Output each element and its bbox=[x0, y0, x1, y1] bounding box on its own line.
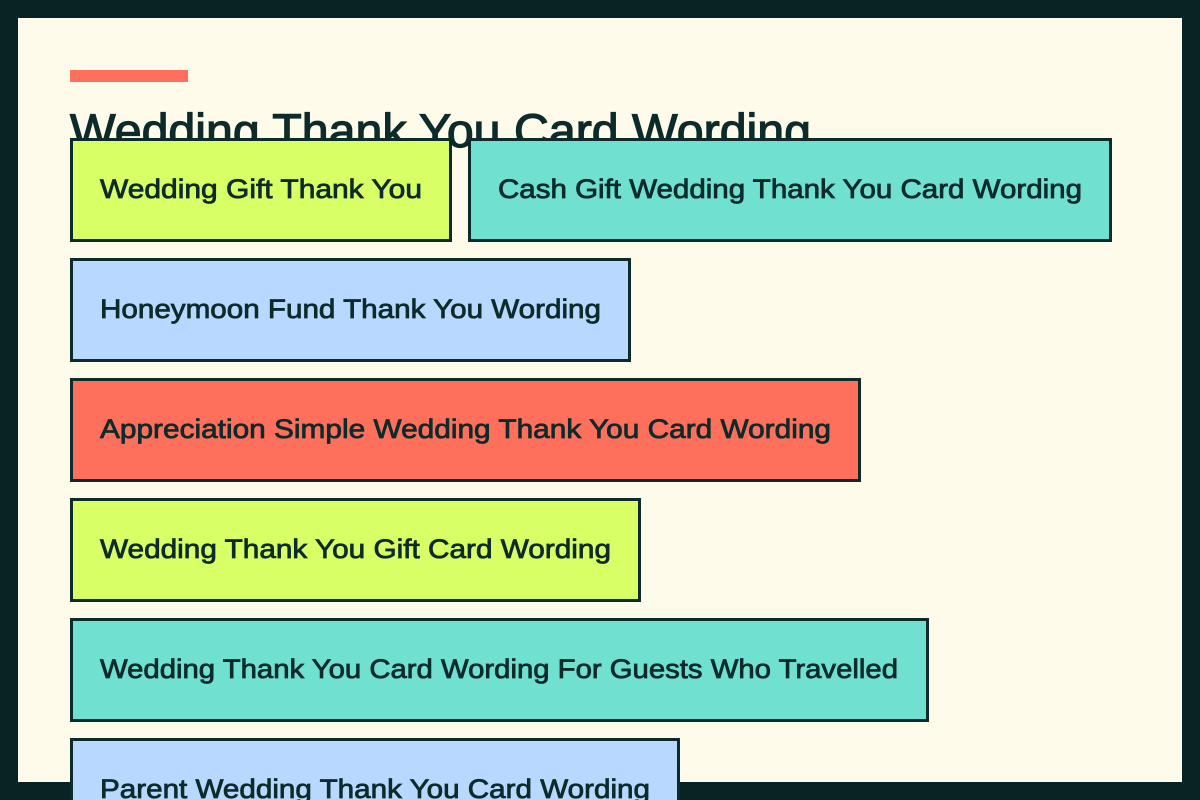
card: Wedding Thank You Card Wording For Guests Who Travelled bbox=[72, 620, 928, 720]
card: Wedding Thank You Gift Card Wording: Wedding Thank You Gift Card Wording bbox=[100, 534, 611, 564]
card: Parent Wedding Thank You Card Wording bbox=[70, 738, 680, 800]
card: Appreciation Simple Wedding Thank You Card Wording: Appreciation Simple Wedding Thank You Card Wording bbox=[100, 414, 831, 444]
card: Honeymoon Fund Thank You Wording: Honeymoon Fund Thank You Wording bbox=[100, 294, 601, 324]
card: Wedding Gift Thank You bbox=[72, 140, 450, 240]
card: Cash Gift Wedding Thank You Card Wording: Cash Gift Wedding Thank You Card Wording bbox=[498, 174, 1082, 204]
card: Wedding Thank You Card Wording For Guests Who Travelled: Wedding Thank You Card Wording For Guests Who Travelled bbox=[100, 654, 898, 684]
card: Cash Gift Wedding Thank You Card Wording bbox=[470, 140, 1110, 240]
accent bar bbox=[70, 70, 188, 82]
card: Wedding Thank You Gift Card Wording bbox=[72, 500, 640, 600]
card: Honeymoon Fund Thank You Wording bbox=[72, 260, 630, 360]
card: Appreciation Simple Wedding Thank You Card Wording bbox=[72, 380, 860, 480]
card: Wedding Gift Thank You: Wedding Gift Thank You bbox=[100, 174, 422, 204]
title: Wedding Thank You Card Wording bbox=[70, 104, 811, 157]
